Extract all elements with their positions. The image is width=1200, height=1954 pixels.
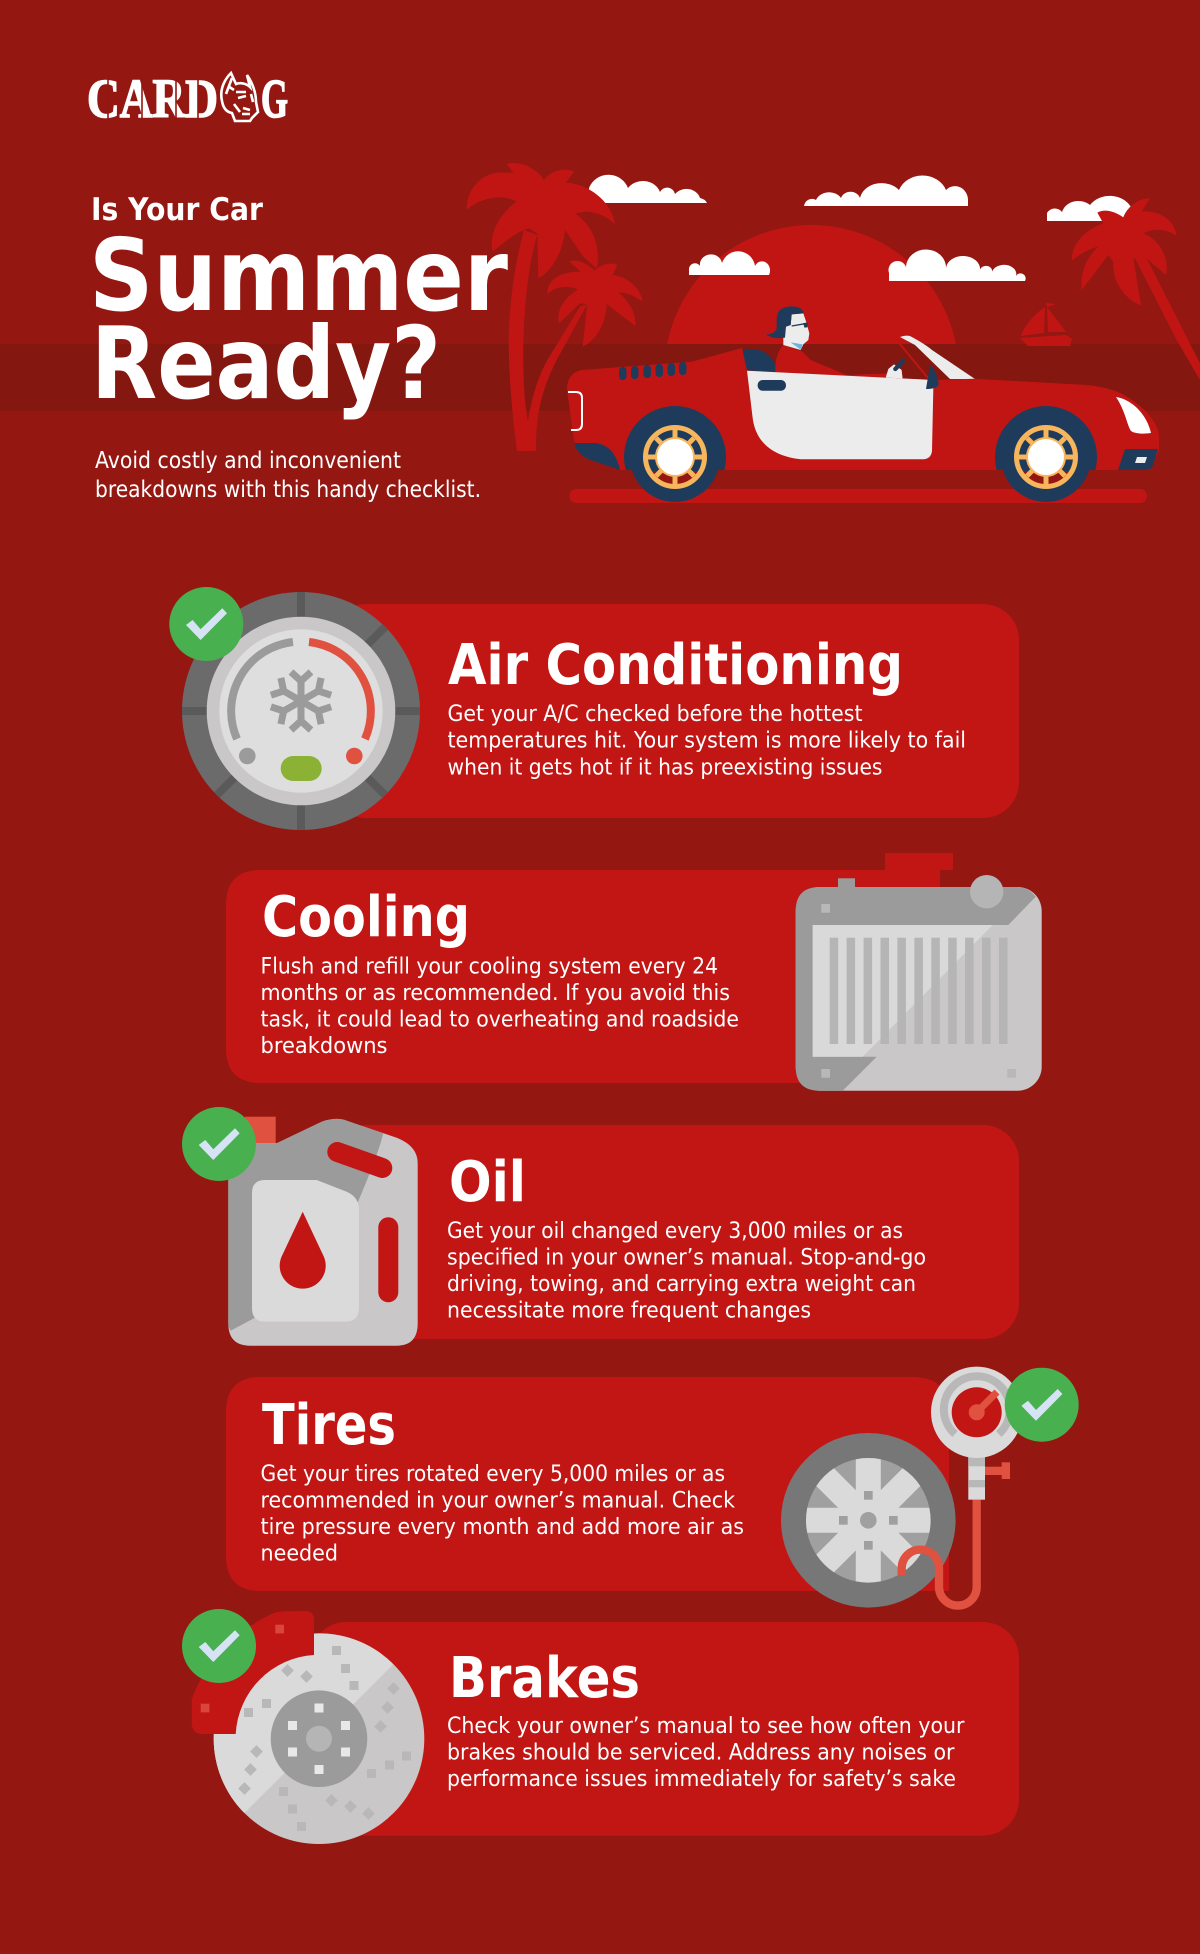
title: Ready? bbox=[91, 305, 441, 422]
driver bbox=[744, 306, 903, 381]
body text: Get your A/C checked before the hottest bbox=[448, 701, 863, 727]
check badge bbox=[169, 587, 243, 661]
body text: necessitate more frequent changes bbox=[447, 1298, 811, 1324]
panel: brakes bbox=[180, 1609, 1019, 1850]
body text: task, it could lead to overheating and roadside bbox=[260, 1006, 739, 1032]
subtitle bbox=[95, 448, 481, 503]
panel: cooling bbox=[226, 853, 1042, 1091]
body text: performance issues immediately for safety’s sake bbox=[447, 1766, 956, 1792]
icon: brake caliper bbox=[192, 1611, 314, 1734]
hood vents bbox=[619, 362, 686, 380]
car door bbox=[747, 371, 934, 459]
heading: Oil bbox=[449, 1150, 526, 1215]
mirror bbox=[926, 365, 939, 389]
headlight bbox=[1116, 397, 1151, 434]
icon: dog head bbox=[221, 73, 258, 121]
check badge bbox=[1005, 1368, 1079, 1442]
horizon band bbox=[0, 344, 1200, 411]
heading: Cooling bbox=[262, 885, 470, 950]
body text: recommended in your owner’s manual. Check bbox=[260, 1488, 735, 1514]
check badge bbox=[182, 1107, 256, 1181]
icon: oil drop bbox=[280, 1212, 326, 1289]
panel: tires bbox=[226, 1367, 1079, 1608]
body text: temperatures hit. Your system is more likely to fail bbox=[448, 728, 966, 754]
rear bumper bbox=[574, 443, 620, 470]
body text: when it gets hot if it has preexisting issues bbox=[448, 754, 882, 780]
tail light bbox=[568, 392, 582, 430]
front bumper bbox=[1118, 449, 1158, 470]
body text: brakes should be serviced. Address any noises or bbox=[447, 1740, 955, 1766]
panel: oil bbox=[182, 1107, 1019, 1346]
windshield bbox=[899, 336, 975, 379]
heading: Tires bbox=[262, 1393, 396, 1458]
body text: Get your tires rotated every 5,000 miles or as bbox=[260, 1461, 725, 1487]
body text: specified in your owner’s manual. Stop-and-go bbox=[447, 1244, 926, 1270]
subtitle: Avoid costly and inconvenient bbox=[95, 448, 401, 474]
heading: Brakes bbox=[449, 1646, 640, 1711]
clouds bbox=[589, 175, 1145, 281]
sun bbox=[667, 225, 956, 344]
icon: brake disc bbox=[214, 1633, 424, 1844]
palm trees: left pair bbox=[467, 163, 643, 451]
title: Summer bbox=[89, 217, 509, 334]
body text: tire pressure every month and add more air as bbox=[260, 1514, 744, 1540]
car body bbox=[567, 348, 1159, 470]
body text bbox=[448, 701, 966, 780]
icon: oil jug bbox=[228, 1117, 418, 1346]
door handle bbox=[758, 380, 786, 391]
hero illustration bbox=[467, 163, 1200, 519]
body text: Get your oil changed every 3,000 miles or as bbox=[447, 1218, 903, 1244]
heading: kicker: Is Your Car bbox=[91, 192, 264, 228]
icon: tire bbox=[781, 1433, 956, 1608]
body text bbox=[260, 954, 739, 1059]
icon: snowflake bbox=[271, 672, 331, 730]
check badge bbox=[182, 1609, 256, 1683]
rear wheel bbox=[624, 406, 726, 508]
body text: Flush and refill your cooling system every 24 bbox=[260, 954, 718, 980]
title bbox=[89, 217, 509, 422]
front wheel bbox=[995, 406, 1097, 508]
panel: air conditioning bbox=[169, 587, 1019, 830]
body text bbox=[447, 1713, 965, 1792]
heading: Air Conditioning bbox=[448, 633, 903, 698]
icon: AC dial bbox=[182, 592, 420, 830]
body text: Check your owner’s manual to see how often your bbox=[447, 1713, 965, 1739]
subtitle: breakdowns with this handy checklist. bbox=[95, 477, 481, 503]
body text bbox=[260, 1461, 744, 1566]
body text: months or as recommended. If you avoid this bbox=[260, 980, 730, 1006]
icon: radiator bbox=[796, 875, 1042, 1091]
body text: breakdowns bbox=[260, 1033, 388, 1059]
body text: needed bbox=[260, 1540, 338, 1566]
sailboat bbox=[1020, 303, 1072, 346]
icon: pressure gauge bbox=[902, 1367, 1022, 1606]
logo: G bbox=[261, 68, 288, 129]
body text: driving, towing, and carrying extra weight can bbox=[447, 1271, 916, 1297]
palm tree: right bbox=[1072, 198, 1200, 380]
body text bbox=[447, 1218, 926, 1324]
road bbox=[570, 489, 1147, 503]
logo: CARD bbox=[87, 68, 218, 129]
